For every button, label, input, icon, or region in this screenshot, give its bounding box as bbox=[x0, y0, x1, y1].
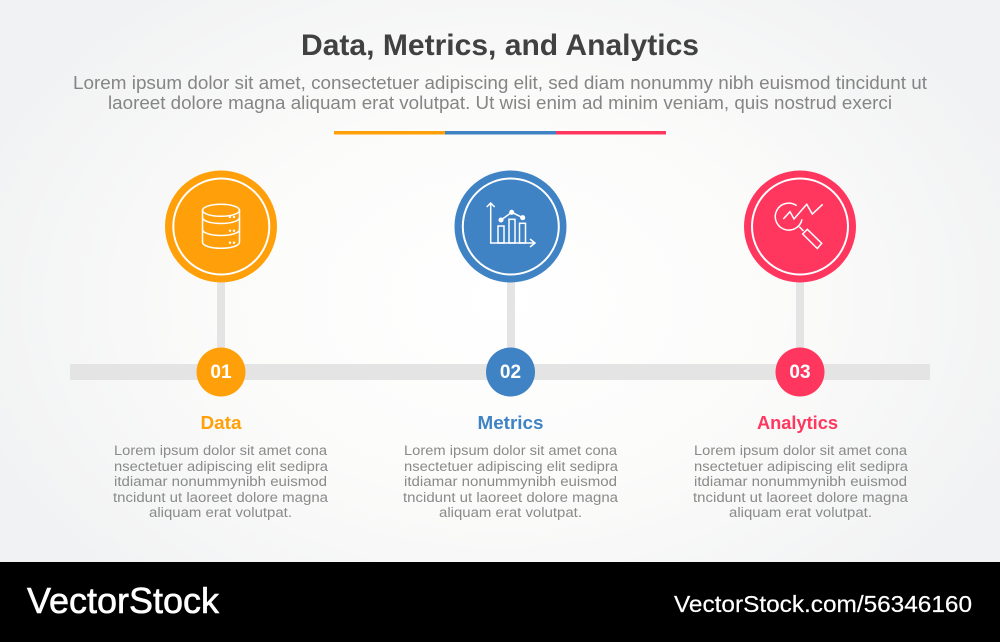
heading: Analytics: Analytics bbox=[757, 413, 838, 433]
step 3: analytics bbox=[693, 170, 909, 520]
subtitle text bbox=[73, 73, 927, 113]
body text 2: itdiamar nonummynibh euismod bbox=[404, 474, 617, 489]
body text 2: tncidunt ut laoreet dolore magna bbox=[403, 490, 619, 505]
body text 1: Lorem ipsum dolor sit amet cona bbox=[114, 443, 328, 458]
footer bar bbox=[0, 562, 1000, 642]
icon circle: metrics bbox=[454, 170, 566, 282]
connector 2 bbox=[507, 280, 515, 352]
body text 1: tncidunt ut laoreet dolore magna bbox=[113, 490, 329, 505]
connector 1 bbox=[217, 280, 225, 352]
number badge 01 bbox=[196, 348, 246, 396]
step 1: data bbox=[113, 170, 329, 520]
step 2: metrics bbox=[403, 170, 619, 520]
connector 3 bbox=[796, 280, 804, 352]
tricolor title underline bbox=[334, 131, 666, 134]
footer image id: VectorStock.com/56346160 bbox=[674, 591, 972, 617]
footer logo: VectorStock bbox=[27, 580, 220, 621]
body text 2: Lorem ipsum dolor sit amet cona bbox=[404, 443, 618, 458]
body text 2: aliquam erat volutpat. bbox=[439, 505, 582, 520]
body text 2 bbox=[403, 443, 619, 520]
body text 1: nsectetuer adipiscing elit sedipra bbox=[114, 459, 329, 474]
icon: database bbox=[202, 204, 240, 248]
body text 1 bbox=[113, 443, 329, 520]
body text 3 bbox=[693, 443, 909, 520]
number badge 03 bbox=[776, 348, 824, 396]
body text 3: nsectetuer adipiscing elit sedipra bbox=[694, 459, 909, 474]
body text 3: tncidunt ut laoreet dolore magna bbox=[693, 490, 909, 505]
icon: magnifier with trend line bbox=[775, 203, 823, 248]
body text 3: aliquam erat volutpat. bbox=[729, 505, 872, 520]
number badge 02: 02 bbox=[500, 362, 521, 383]
number badge 03: 03 bbox=[789, 362, 811, 383]
number badge 02 bbox=[486, 348, 535, 396]
body text 1: itdiamar nonummynibh euismod bbox=[114, 474, 327, 489]
number badge 01: 01 bbox=[210, 362, 232, 383]
subtitle text: laoreet dolore magna aliquam erat volutpat. Ut wisi enim ad minim veniam, quis nostrud exerci bbox=[108, 93, 892, 113]
heading: Data: Data bbox=[200, 413, 243, 433]
body text 3: itdiamar nonummynibh euismod bbox=[694, 474, 907, 489]
timeline bar bbox=[70, 364, 930, 380]
title: Data, Metrics, and Analytics bbox=[301, 29, 699, 62]
body text 1: aliquam erat volutpat. bbox=[149, 505, 292, 520]
icon circle: analytics bbox=[744, 170, 856, 282]
icon circle: data bbox=[165, 170, 277, 282]
body text 3: Lorem ipsum dolor sit amet cona bbox=[694, 443, 908, 458]
icon: bar chart with arrows bbox=[487, 203, 535, 247]
heading: Metrics: Metrics bbox=[478, 413, 544, 433]
subtitle text: Lorem ipsum dolor sit amet, consectetuer adipiscing elit, sed diam nonummy nibh euismod tincidunt ut bbox=[73, 73, 927, 93]
body text 2: nsectetuer adipiscing elit sedipra bbox=[404, 459, 619, 474]
